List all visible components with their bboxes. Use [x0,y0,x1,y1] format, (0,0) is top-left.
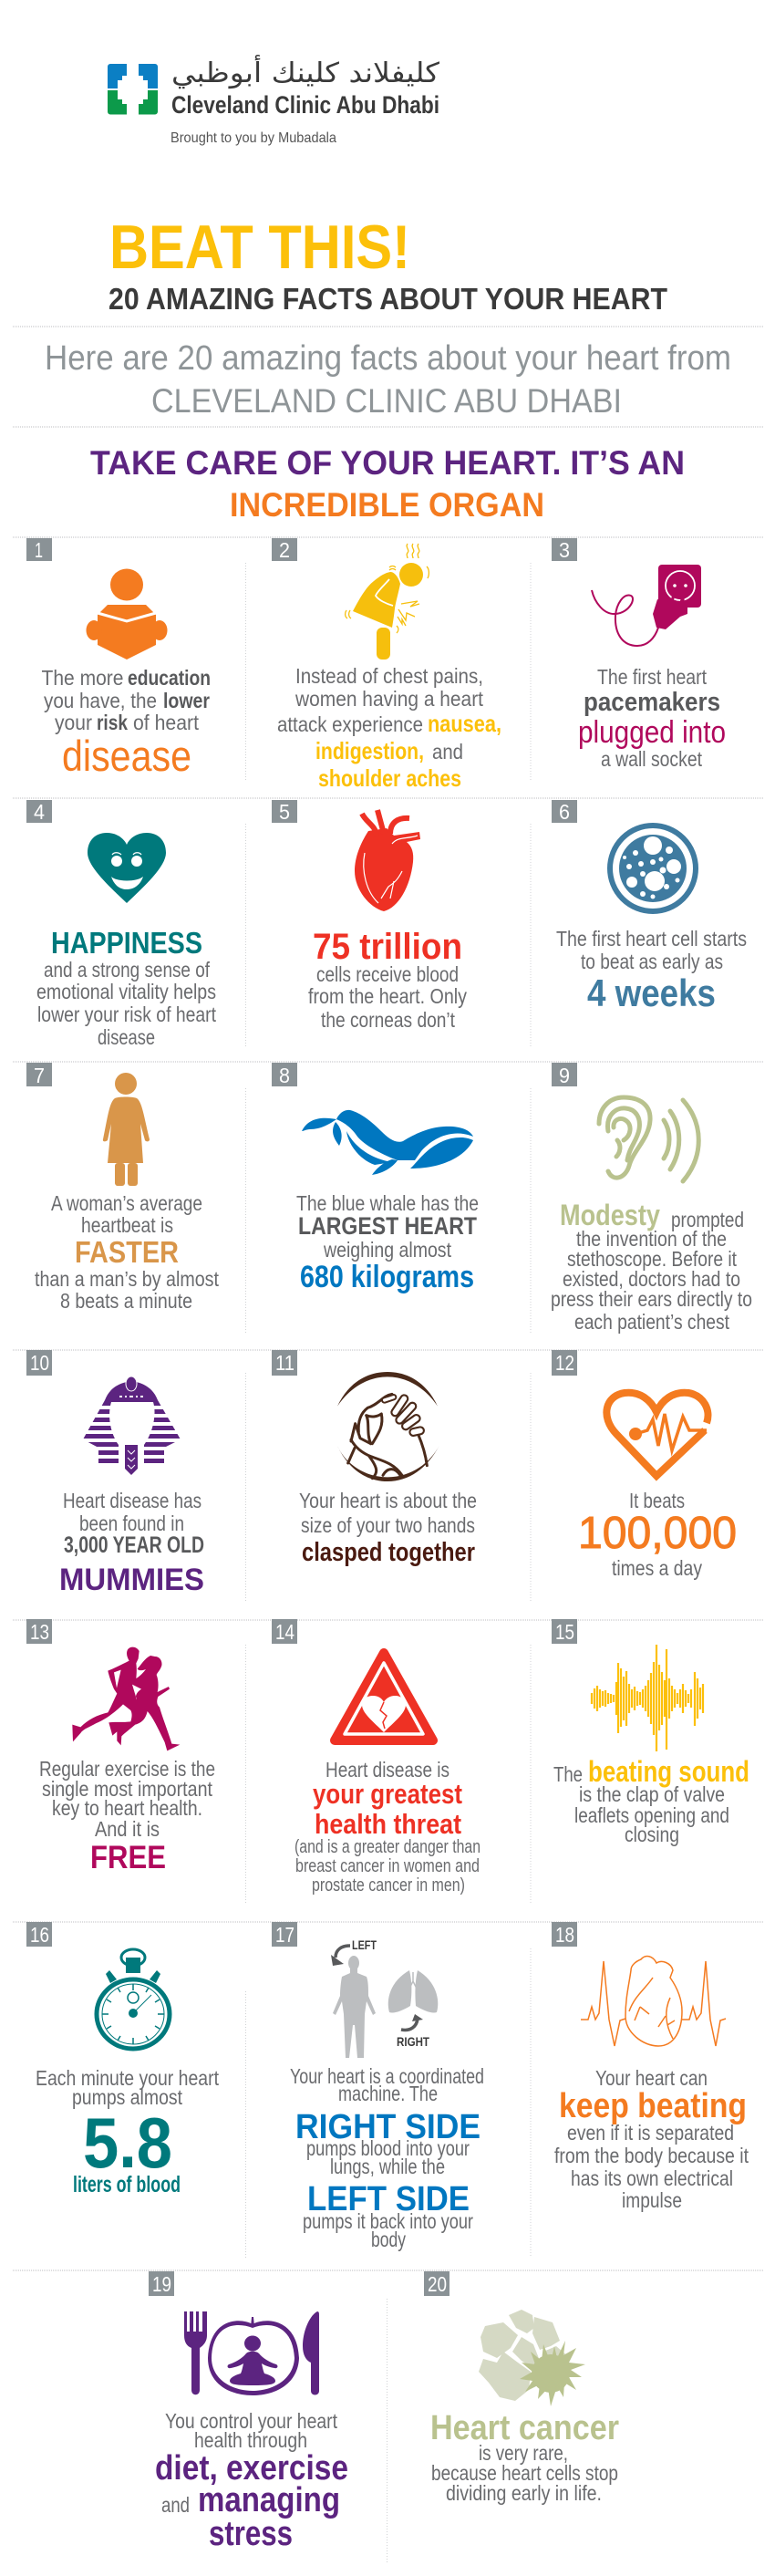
badge 14: 14 [275,1620,294,1644]
badge 5 [272,800,297,824]
badge 6: 6 [559,800,570,824]
fact 19 text [155,2409,348,2553]
fact 5 text: cells receive blood [316,962,459,986]
fact 8 text: The blue whale has the [296,1191,479,1215]
fact 2 text: and [432,740,463,763]
badge 4: 4 [34,800,45,824]
fact 3 text: plugged into [578,715,726,750]
fact 5 text [308,927,467,1032]
fact 19 text: diet, exercise [155,2449,348,2488]
fact 17 text: pumps it back into your [303,2209,473,2233]
fact 5 text: from the heart. Only [308,984,467,1008]
arabic logotype: كليفلاند كلينك أبوظبي [171,54,440,89]
badge 8: 8 [279,1064,290,1087]
panel: fact 7 woman's heartbeat [26,1063,220,1313]
badge 19: 19 [152,2272,171,2296]
fact 2 text: Instead of chest pains, [295,664,483,688]
fact 12 text: It beats [629,1489,685,1512]
fact 15 text: is the clap of valve [579,1782,725,1806]
badge 11: 11 [275,1351,294,1375]
heading: TAKE CARE OF YOUR HEART. IT’S AN [90,444,685,482]
fact 12 text [578,1489,737,1580]
fact 17 text [290,2064,484,2251]
fact 3 text [578,665,726,771]
icon: petri dish cell [610,826,696,911]
fact 2 text: attack experience [277,712,423,736]
panel: fact 6 first heart cell [552,800,747,1014]
fact 16 text: pumps almost [72,2085,183,2109]
fact 6 text: to beat as early as [581,950,723,973]
fact 18 text [554,2066,749,2212]
fact 15 text [553,1755,749,1846]
title: BEAT THIS! [109,213,410,282]
badge 3: 3 [559,538,570,562]
fact 20 text: dividing early in life. [446,2481,602,2505]
fact 10 text: been found in [79,1511,184,1535]
panel: fact 11 clasped hands [272,1350,477,1567]
fact 6 text: 4 weeks [587,971,716,1014]
panel: fact 14 greatest health threat [272,1619,480,1896]
panel: fact 19 control your health [149,2271,348,2553]
fact 15 text: leaflets opening and [574,1803,729,1827]
fact 9 text: each patient’s chest [574,1310,730,1334]
icon: sound waveform [592,1645,703,1751]
fact 1 text: lower [163,689,210,712]
fact 1 text: you have, the [44,689,157,712]
heading: INCREDIBLE ORGAN [230,486,544,524]
icon: Cleveland Clinic cross logo [108,64,158,115]
icon: two runners [72,1647,180,1750]
fact 19 text: health through [194,2428,307,2452]
fact 11 text: clasped together [302,1538,475,1567]
fact 11 text: size of your two hands [301,1513,475,1537]
fact 17 text: RIGHT SIDE [295,2108,480,2146]
intro text [45,339,731,420]
panel: fact 20 heart cancer [424,2271,619,2505]
icon: pharaoh mask [80,1376,184,1475]
badge 12: 12 [555,1351,574,1375]
fact 2 text: women having a heart [294,687,484,711]
fact 1 text: of heart [133,711,200,734]
fact 2 text [277,664,501,792]
panel: fact 1 education [26,538,211,780]
badge 3 [552,538,577,562]
fact 18 text: even if it is separated [567,2121,734,2145]
badge 1: 1 [35,538,43,562]
icon: ear with sound waves [599,1097,698,1181]
fact 18 text: impulse [622,2188,682,2212]
fact 8 text: weighing almost [323,1238,452,1262]
icon: woman bending in pain [346,544,429,660]
fact 14 text: (and is a greater danger than [294,1837,480,1857]
icon: plug and wall socket [592,565,701,646]
fact 13 text: key to heart health. [52,1796,202,1820]
fact 8 text [296,1191,479,1294]
fact 11 text: Your heart is about the [299,1489,477,1512]
header logo: Cleveland Clinic Abu Dhabi [108,54,440,146]
badge 4 [26,800,52,824]
fact 12 text: times a day [612,1556,702,1580]
panel: fact 2 women heart attack [272,538,501,792]
icon: stopwatch [97,1949,170,2049]
fact 3 text: a wall socket [601,747,703,771]
fact 18 text: keep beating [559,2087,747,2125]
fact 1 text: risk [97,711,128,734]
fact 7 text: heartbeat is [81,1213,173,1237]
badge 8 [272,1063,297,1087]
badge 7 [26,1063,52,1087]
fact 7 text: FASTER [75,1235,179,1269]
icon: heart with ecg [606,1393,708,1476]
fact 1 text: disease [62,732,191,780]
fact 16 text [36,2066,220,2197]
title [108,213,667,316]
fact 19 text: You control your heart [165,2409,338,2433]
fact 5 text: 75 trillion [313,927,462,967]
fact 15 text: closing [625,1823,679,1846]
fact 13 text: And it is [95,1817,160,1841]
fact 19 text: stress [209,2515,293,2553]
fact 10 text: MUMMIES [59,1563,204,1597]
icon: smiling heart [88,833,166,903]
panel: fact 9 stethoscope [551,1063,752,1334]
icon: body, lungs and arrows: RIGHT [397,2034,429,2049]
badge 5: 5 [279,800,290,824]
fact 20 text [430,2409,619,2505]
heading [90,444,685,524]
sponsor line: Brought to you by Mubadala [170,130,336,146]
panel: fact 4 happiness [26,800,217,1049]
fact 7 text [35,1191,220,1313]
icon: heart with ecg lines [581,1957,726,2046]
fact 13 text: FREE [90,1840,166,1875]
fact 8 text: LARGEST HEART [298,1212,477,1240]
fact 11 text [299,1489,477,1567]
fact 15 text: The [553,1762,583,1786]
fact 4 text [36,926,217,1049]
fact 14 text: health threat [315,1808,461,1840]
title: 20 AMAZING FACTS ABOUT YOUR HEART [108,282,667,316]
panel: fact 10 mummies [26,1350,204,1597]
fact 14 text: prostate cancer in men) [312,1875,465,1896]
fact 12 text: 100,000 [578,1509,737,1558]
badge 7: 7 [34,1064,45,1087]
fact 1 text: The more [42,666,124,690]
fact 14 text: Heart disease is [326,1758,450,1781]
badge 17: 17 [275,1923,294,1947]
icon: blue whale [302,1110,473,1175]
fact 14 text [294,1758,480,1896]
fact 14 text: your greatest [313,1778,462,1810]
badge 9 [552,1063,577,1087]
badge 2: 2 [279,538,290,562]
fact 18 text: has its own electrical [571,2166,733,2190]
fact 20 text: Heart cancer [430,2409,619,2447]
fact 9 text: the invention of the [576,1227,727,1251]
panel: fact 5 75 trillion [272,800,467,1032]
fact 1 text [42,666,211,780]
badge 6 [552,800,577,824]
fact 6 text: The first heart cell starts [556,927,747,950]
icon: fork, apple, meditating person, knife [184,2311,319,2395]
icon: body, lungs and arrows [331,1937,438,2058]
fact 9 text: stethoscope. Before it [567,1247,738,1271]
fact 13 text [39,1757,215,1875]
badge 18: 18 [555,1923,574,1947]
logotype: Cleveland Clinic Abu Dhabi [171,91,439,119]
intro text: CLEVELAND CLINIC ABU DHABI [151,382,622,420]
fact 2 text: shoulder aches [318,764,461,792]
fact 4 text: and a strong sense of [44,958,210,982]
fact 3 text: The first heart [597,665,708,689]
panel: fact 13 exercise [26,1619,215,1875]
fact 9 text: existed, doctors had to [563,1267,740,1291]
fact 1 text: your [55,711,92,734]
fact 10 text: Heart disease has [63,1489,202,1512]
fact 17 text: LEFT SIDE [307,2180,470,2218]
panel: fact 17 coordinated machine [272,1922,484,2251]
fact 13 text: Regular exercise is the [39,1757,215,1781]
fact 19 text: managing [198,2481,340,2519]
badge 1 [26,538,52,562]
badge 13: 13 [30,1620,49,1644]
panel: fact 3 pacemakers [552,538,726,771]
icon: cells and cancer cell [479,2310,585,2406]
fact 17 text: pumps blood into your [306,2136,470,2160]
panel: fact 15 beating sound [552,1619,749,1846]
fact 17 text: body [371,2228,406,2251]
panel: fact 18 keep beating [552,1922,749,2212]
intro text: Here are 20 amazing facts about your heart from [45,339,731,378]
fact 9 text: Modesty [560,1199,660,1231]
badge 9: 9 [559,1064,570,1087]
fact 9 text [551,1199,752,1334]
panel: fact 8 blue whale [272,1063,479,1294]
fact 16 text: Each minute your heart [36,2066,220,2090]
fact 10 text: 3,000 YEAR OLD [64,1532,204,1558]
fact 20 text: is very rare, [479,2441,568,2465]
fact 19 text: and [161,2493,190,2517]
fact 6 text [556,927,747,1014]
fact 7 text: than a man’s by almost [35,1267,220,1291]
fact 5 text: the corneas don’t [321,1008,456,1032]
fact 4 text: emotional vitality helps [36,980,216,1003]
badge 15: 15 [555,1620,574,1644]
badge 20: 20 [428,2272,447,2296]
icon: person reading [86,569,168,660]
fact 7 text: A woman’s average [51,1191,202,1215]
fact 3 text: pacemakers [584,688,720,717]
fact 2 text: indigestion, [315,737,424,764]
fact 9 text: prompted [671,1208,744,1231]
fact 1 text: education [128,666,211,690]
badge 2 [272,538,297,562]
icon: warning triangle broken heart [335,1653,433,1740]
fact 2 text: nausea, [428,710,501,737]
panel: fact 12 100,000 beats [552,1350,737,1580]
fact 14 text: breast cancer in women and [295,1856,480,1876]
fact 8 text: 680 kilograms [300,1260,474,1294]
icon: clasped hands [337,1372,439,1481]
fact 10 text [59,1489,204,1597]
panel: fact 16 liters of blood [26,1922,220,2197]
fact 16 text: 5.8 [83,2103,172,2183]
fact 13 text: single most important [42,1777,213,1801]
fact 17 text: machine. The [338,2082,438,2105]
icon: woman figure [103,1073,150,1186]
icon: anatomical heart [355,810,420,911]
badge 16: 16 [30,1923,49,1947]
icon: body, lungs and arrows: LEFT [352,1937,377,1952]
fact 17 text: lungs, while the [330,2155,445,2178]
fact 20 text: because heart cells stop [431,2461,618,2485]
fact 17 text: Your heart is a coordinated [290,2064,484,2088]
fact 16 text: liters of blood [73,2172,181,2197]
badge 10: 10 [30,1351,49,1375]
fact 4 text: disease [98,1025,155,1049]
fact 4 text: HAPPINESS [51,926,202,960]
fact 7 text: 8 beats a minute [60,1289,192,1313]
fact 4 text: lower your risk of heart [37,1002,217,1026]
fact 18 text: Your heart can [595,2066,708,2090]
